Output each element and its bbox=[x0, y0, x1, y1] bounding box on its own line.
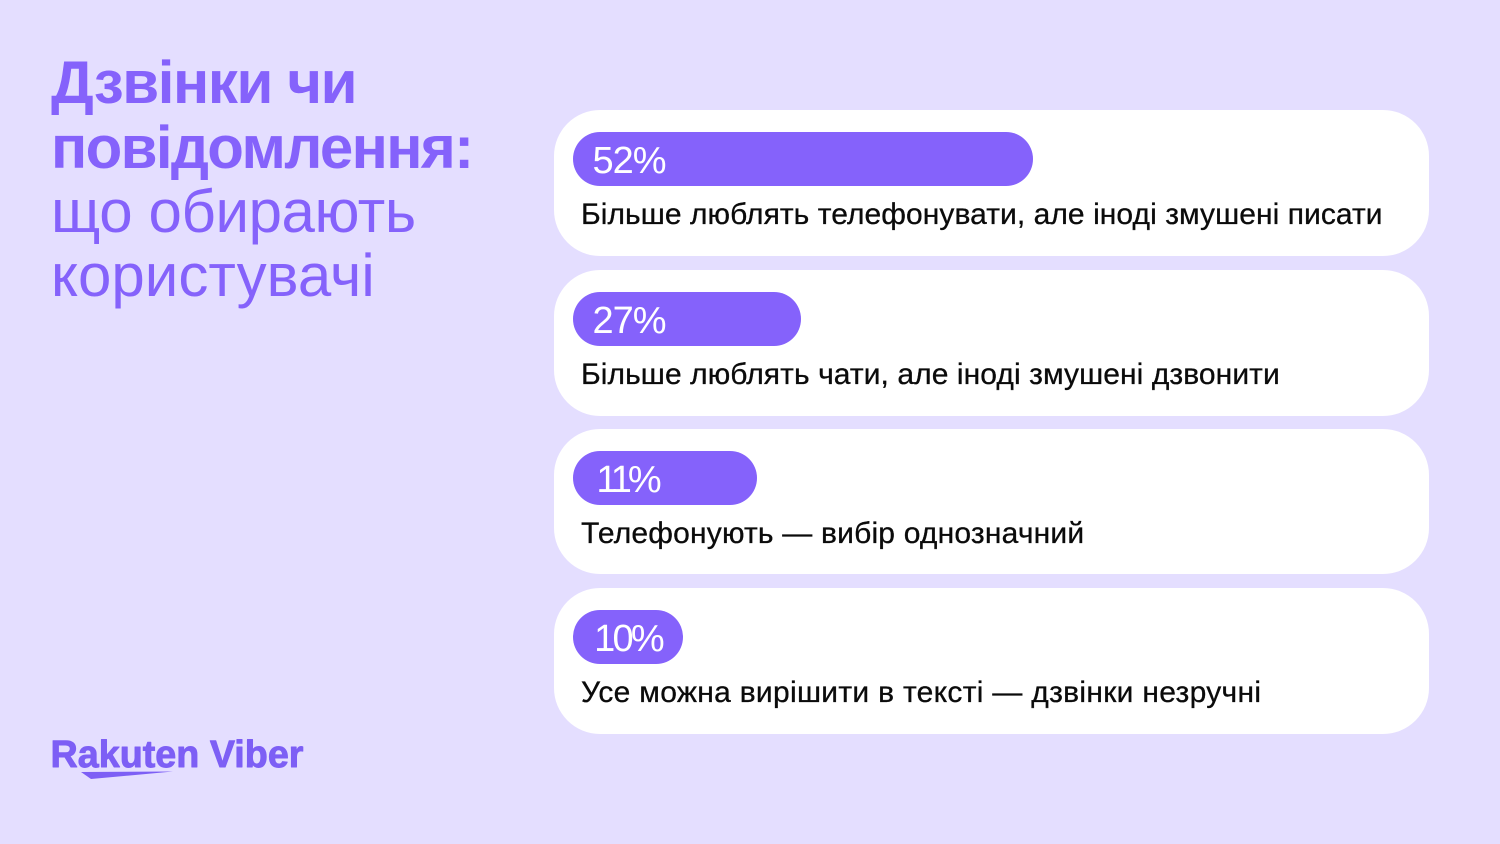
logo: Rakuten Viber bbox=[50, 734, 304, 779]
title line: bold: повідомлення: bbox=[51, 114, 472, 181]
logo text: Rakuten Viber bbox=[50, 734, 304, 776]
bar: 10%: 10% bbox=[594, 618, 662, 660]
bar: 27%: 27% bbox=[592, 300, 666, 342]
bar: 52% bbox=[573, 132, 1033, 186]
panel: 10% bbox=[554, 588, 1429, 734]
panel: 27% bbox=[554, 270, 1429, 416]
panel: 11% bbox=[554, 429, 1429, 574]
bar: 10% bbox=[573, 610, 683, 664]
bar: 11%: 11% bbox=[596, 459, 658, 501]
title line: bold: Дзвінки чи bbox=[51, 49, 356, 116]
title line: regular: що обирають bbox=[51, 178, 416, 245]
logo swoosh bbox=[81, 772, 173, 779]
panel: 52% bbox=[554, 110, 1429, 256]
label: Телефонують — вибір однозначний bbox=[581, 517, 1084, 550]
title bbox=[51, 49, 472, 309]
label: Більше люблять чати, але іноді змушені дзвонити bbox=[581, 358, 1280, 390]
bar: 11% bbox=[573, 451, 757, 505]
bar: 52%: 52% bbox=[592, 140, 666, 182]
bar: 27% bbox=[573, 292, 801, 346]
title line: regular: користувачі bbox=[51, 242, 375, 309]
label: Усе можна вирішити в тексті — дзвінки незручні bbox=[581, 676, 1261, 709]
label: Більше люблять телефонувати, але іноді змушені писати bbox=[581, 198, 1383, 231]
